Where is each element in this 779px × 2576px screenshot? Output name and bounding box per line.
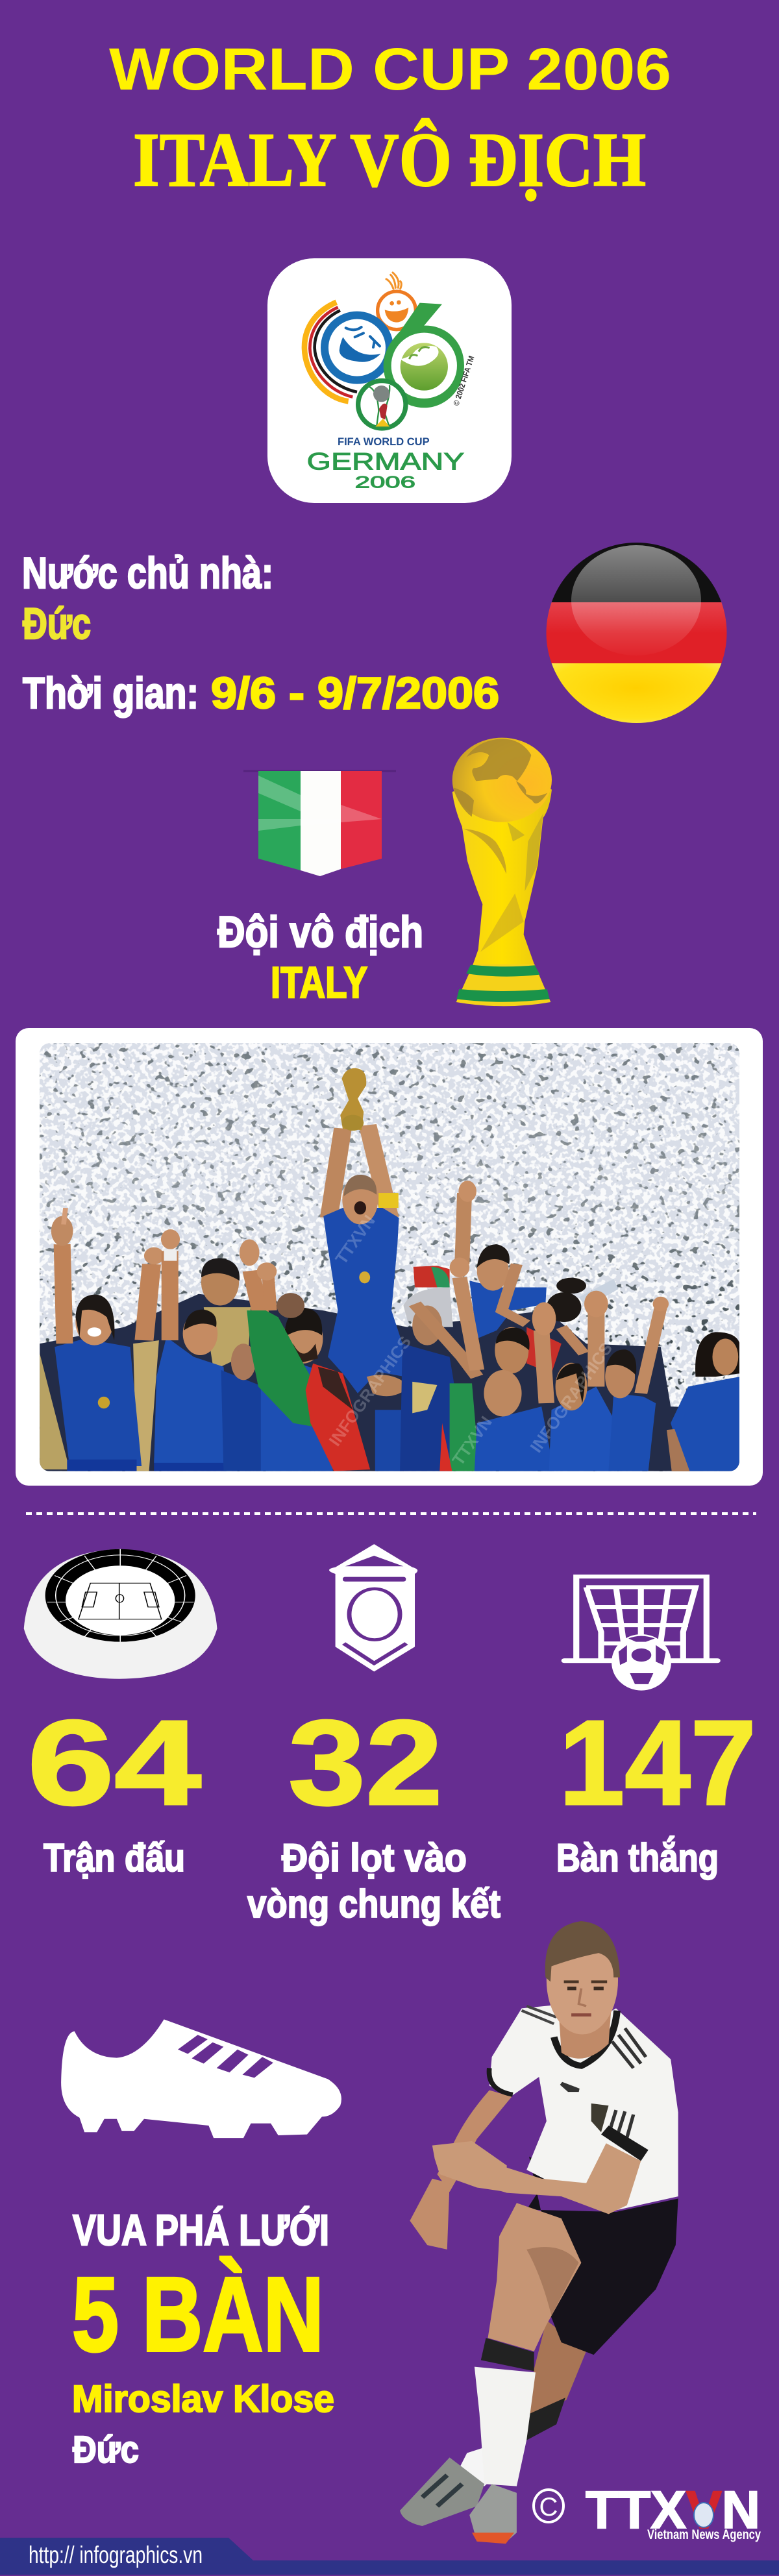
- champion label: Đội vô địch: [217, 907, 423, 957]
- icon: football boot: [61, 2019, 341, 2138]
- logo: Germany: GERMANY: [307, 447, 464, 474]
- label: finalists: Đội lọt vào: [282, 1836, 467, 1880]
- player left: [55, 1339, 142, 1466]
- front right players: [475, 1406, 554, 1471]
- host country label: Nước chủ nhà:: [22, 548, 273, 598]
- hat fan: [414, 1266, 450, 1287]
- center lower: [375, 1410, 405, 1471]
- host country value: Đức: [23, 599, 91, 648]
- neck: [559, 2011, 611, 2059]
- captain: [329, 1129, 343, 1218]
- sock: [481, 2338, 534, 2371]
- label: finalists: [247, 1836, 501, 1926]
- dates label: Thời gian:: [23, 669, 199, 718]
- photo watermarks: TTXVN: [448, 1412, 496, 1469]
- stat: 32: 32: [288, 1696, 443, 1830]
- icon: pennant: [329, 1544, 417, 1672]
- front boot: [469, 2484, 517, 2544]
- head: [547, 1926, 618, 2035]
- near arm: [489, 2143, 641, 2214]
- icon: goal and ball: [562, 1576, 721, 1691]
- photo watermarks: TTXVN: [331, 1211, 379, 1268]
- dates value: 9/6 - 9/7/2006: [211, 669, 499, 718]
- stat: 147: 147: [559, 1696, 756, 1830]
- photo watermarks: [325, 1211, 616, 1469]
- photo card: Italy lifting the trophy: [16, 1028, 763, 1486]
- heading: top scorer: VUA PHÁ LƯỚI: [73, 2206, 329, 2255]
- icon: World Cup trophy: [452, 738, 552, 1006]
- label: matches: Trận đấu: [43, 1836, 185, 1880]
- player country: Đức: [73, 2429, 139, 2471]
- photo watermarks: INFOGRAPHICS: [325, 1332, 415, 1449]
- front thigh: [488, 2203, 581, 2351]
- player name: Miroslav Klose: [72, 2378, 334, 2420]
- photo scene: [40, 1043, 740, 1471]
- footer bar: [0, 2538, 779, 2575]
- far arm: [437, 2090, 512, 2192]
- back crowd: [40, 1294, 740, 1471]
- logo: copyright: © 2002 FIFA TM: [452, 354, 476, 407]
- dotted divider: [26, 1512, 756, 1515]
- photo watermarks: INFOGRAPHICS: [526, 1339, 616, 1456]
- right group: [469, 1281, 547, 1339]
- player 2: [154, 1340, 224, 1463]
- icon: Italy flag pennant: [243, 771, 396, 876]
- logo: 2006: 2006: [355, 474, 415, 492]
- champion name: ITALY: [271, 958, 367, 1007]
- lower hand: [410, 2179, 450, 2250]
- player 3 with flag: [261, 1366, 333, 1471]
- jersey: [489, 2006, 678, 2212]
- logo artwork: [304, 273, 476, 492]
- copyright symbol: [534, 2490, 563, 2522]
- title: WORLD CUP 2006: [109, 36, 671, 103]
- shorts: [526, 2157, 678, 2355]
- logo: FIFA World Cup: FIFA WORLD CUP: [338, 435, 430, 448]
- icon: stadium: [24, 1549, 217, 1679]
- stat: 64: 64: [27, 1696, 201, 1830]
- player: Miroslav Klose: [400, 1921, 678, 2544]
- back leg: [526, 2320, 586, 2418]
- copyright symbol: C: [539, 2493, 558, 2521]
- footer url: http:// infographics.vn: [29, 2542, 203, 2568]
- label: finalists: vòng chung kết: [247, 1882, 501, 1926]
- label: goals: Bàn thắng: [556, 1836, 719, 1880]
- logo card: FIFA World Cup Germany 2006: [267, 258, 512, 503]
- goals count: 5 BÀN: [72, 2255, 324, 2374]
- logo: TTXVN: TTXVN: [586, 2481, 760, 2540]
- icon: Germany flag ball: [545, 539, 727, 725]
- subtitle: ITALY VÔ ĐỊCH: [133, 117, 646, 202]
- trophy held: [340, 1068, 366, 1130]
- goalkeeper: [204, 1307, 251, 1370]
